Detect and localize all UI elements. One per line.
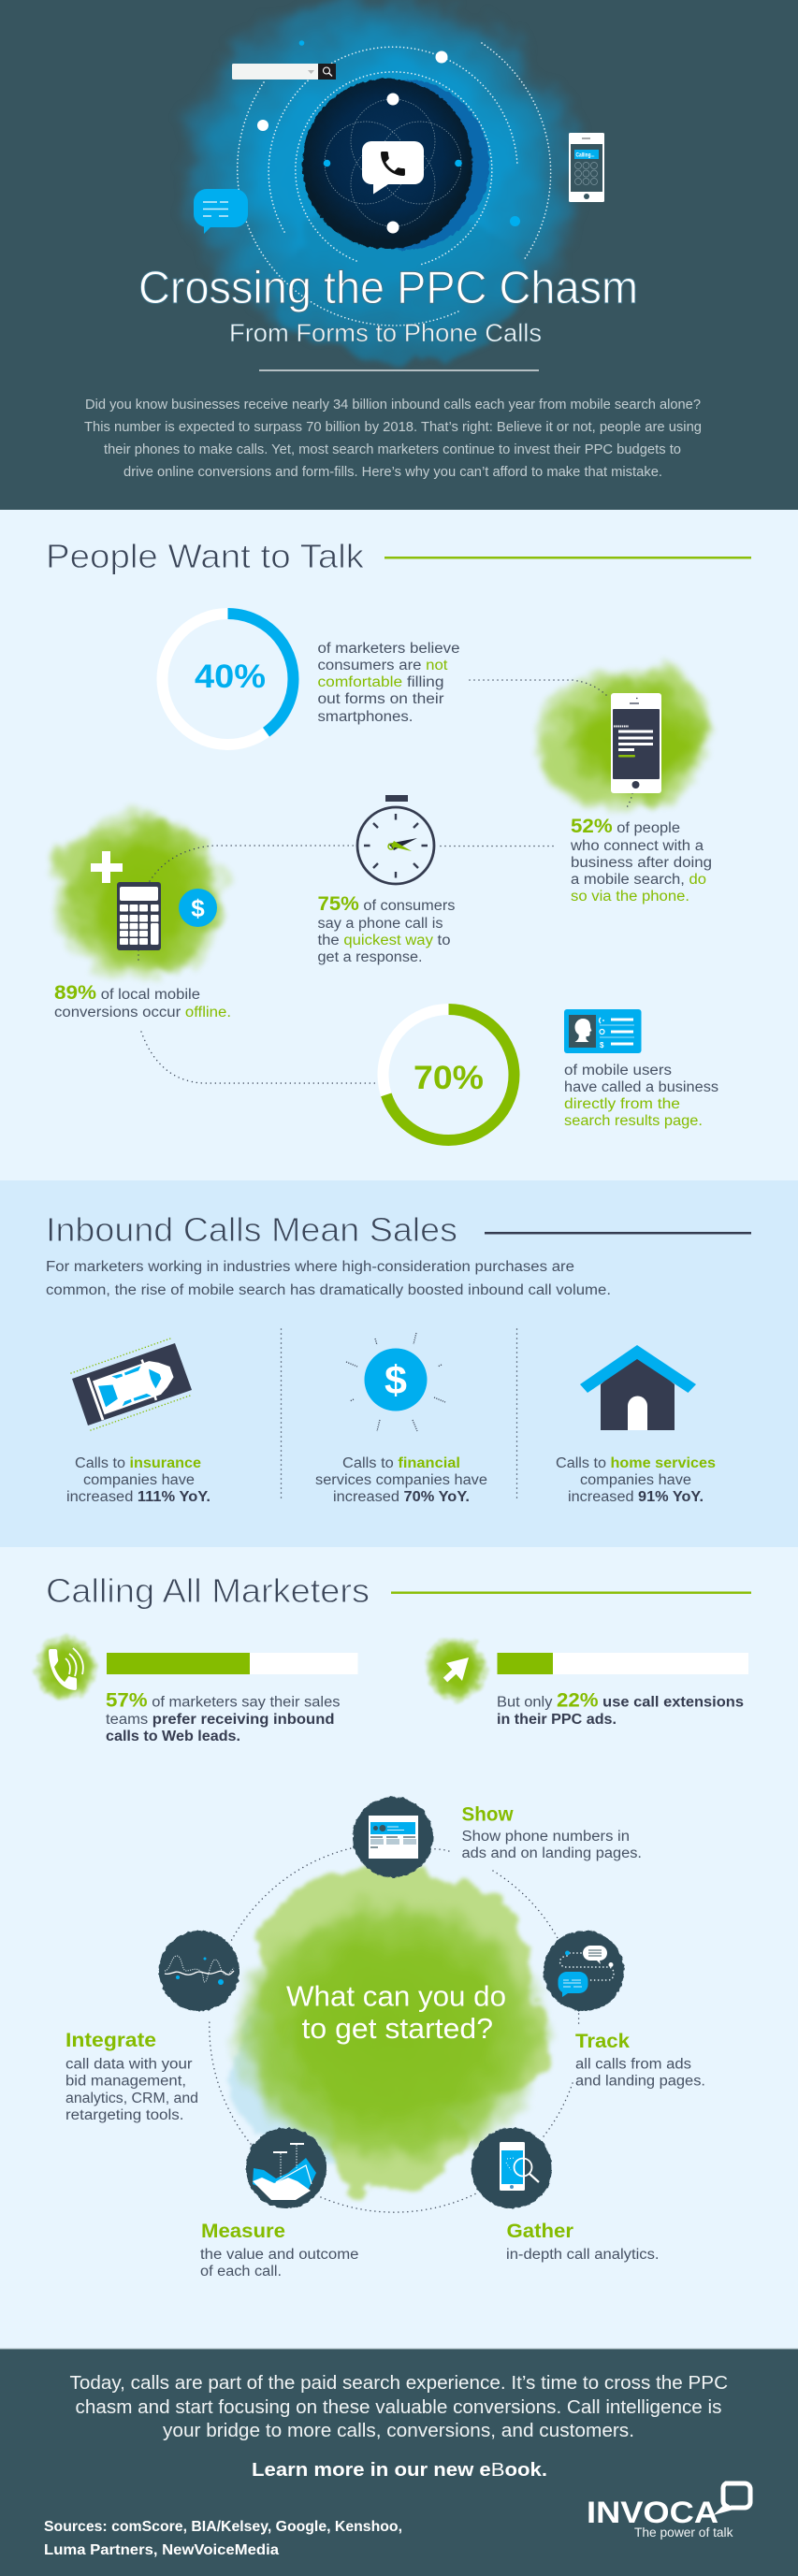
icon: dollar with rays [346,1333,445,1431]
text: 70% stat: of mobile users [564,1063,672,1078]
icon: blue chat bubble [194,189,248,234]
text: home services: Calls to home services [556,1455,716,1471]
text: 22% stat: But only 22% use call extensions [497,1689,744,1712]
text: show: Show phone numbers in [462,1829,630,1845]
panel: Inbound Calls Mean Sales [0,1180,798,1547]
heading: People Want to Talk [46,537,365,575]
donut chart: 40%: 40% [195,658,266,695]
text: 40% stat: out forms on their [318,691,443,707]
text: financial [315,1455,487,1505]
text: insurance: companies have [83,1472,195,1488]
text: insurance: increased 111% YoY. [66,1489,210,1505]
text: gather: Gather [507,2221,573,2242]
text: what can you do [286,1979,506,2045]
logo: Invoca [587,2483,750,2540]
text: 57% stat: teams prefer receiving inbound [106,1712,335,1728]
icon: smartphone calling [569,133,604,202]
panel: hero header [0,0,798,510]
text: insurance: Calls to insurance [75,1455,201,1471]
intro text: For marketers working in industries where high-consideration purchases are [46,1259,574,1275]
text: integrate: call data with your [65,2056,193,2073]
text: 89% stat: 89% of local mobile [54,982,200,1004]
call to action: Learn more in our new e Book. [252,2460,547,2481]
text: 52% stat: so via the phone. [571,889,689,904]
text: measure: of each call. [200,2264,282,2279]
icon: stopwatch [357,795,434,884]
step: measure [246,2128,326,2208]
text: 75% stat: the quickest way to [318,933,451,948]
closing text: your bridge to more calls, conversions, and customers. [163,2421,634,2441]
closing text: Today, calls are part of the paid search experience. It’s time to cross the PPC [69,2373,728,2394]
text: financial: services companies have [315,1472,487,1488]
icon: calculator [91,851,161,950]
text: measure: Measure [201,2221,285,2242]
logo: Invoca: INVOCA [587,2496,718,2529]
icon: contact card [564,1009,642,1053]
text: 70% stat: search results page. [564,1113,703,1129]
text: 75% stat: get a response. [318,949,423,965]
panel: Calling All Marketers [32,1579,751,2276]
bar chart: 22% [498,1653,748,1674]
icon: cursor arrow [425,1636,486,1701]
icon: dollar with rays: $ [384,1358,407,1403]
icon: car on road [71,1338,193,1430]
icon: search bar [232,64,336,80]
sources [44,2519,402,2558]
intro paragraph: drive online conversions and form-fills. Here’s why you can’t afford to make that mistake. [123,465,662,480]
icon: dollar coin: $ [191,894,205,922]
text: 70% stat [564,1063,718,1129]
text: 75% stat [318,893,456,965]
text: 40% stat: comfortable filling [318,674,443,690]
text: 52% stat: 52% of people [571,816,680,837]
icon: phone with form [611,693,661,793]
text: 40% stat: smartphones. [318,709,414,725]
blob: phone form background [539,664,711,814]
heading: Calling All Marketers [46,1571,370,1610]
text: gather: in-depth call analytics. [506,2247,659,2263]
intro text: common, the rise of mobile search has dramatically boosted inbound call volume. [46,1282,611,1298]
bar chart: 57% [107,1653,357,1674]
text: what can you do: to get started? [301,2012,493,2045]
text: integrate: bid management, [65,2073,186,2090]
title: Crossing the PPC Chasm [138,263,638,313]
text: 75% stat: 75% of consumers [318,893,456,915]
text: 57% stat [106,1689,341,1744]
text: 40% stat: of marketers believe [318,641,460,657]
text: 70% stat: have called a business [564,1079,718,1095]
intro paragraph: This number is expected to surpass 70 billion by 2018. That’s right: Believe it or not, people are using [84,420,702,435]
text: integrate: analytics, CRM, and [65,2091,198,2106]
icon: dollar coin [179,889,217,927]
icon: ringing phone [35,1636,96,1701]
text: 57% stat: 57% of marketers say their sales [106,1689,341,1712]
step: gather [472,2128,552,2208]
donut chart: 70% [384,1009,515,1140]
text: integrate: Integrate [65,2030,156,2051]
icon: phone speech bubble [362,141,424,195]
text: home services: increased 91% YoY. [568,1489,704,1505]
text: home services [556,1455,716,1505]
text: 40% stat [318,641,460,725]
text: show: Show [462,1803,514,1826]
donut chart: 40% [163,614,294,745]
text: financial: increased 70% YoY. [333,1489,470,1505]
hero illustration: orbit graphic [173,0,604,360]
intro text [46,1259,611,1298]
step: show [353,1797,433,1877]
donut chart: 70%: 70% [414,1060,484,1096]
text: gather [506,2221,659,2263]
step: track [544,1931,624,2011]
text: show: ads and on landing pages. [462,1845,642,1861]
blob: central green wash [225,1866,550,2191]
intro paragraph: their phones to make calls. Yet, most search marketers continue to invest their PPC budgets to [104,442,681,457]
icon: house [580,1345,696,1430]
text: 22% stat [497,1689,744,1728]
subtitle: From Forms to Phone Calls [229,319,542,347]
step: integrate [159,1931,239,2011]
text: 52% stat [570,816,712,904]
text: 52% stat: business after doing [571,855,712,871]
panel: People Want to Talk [0,510,798,1180]
text: what can you do: What can you do [286,1979,506,2013]
intro paragraph: Did you know businesses receive nearly 34 billion inbound calls each year from mobile search alone? [85,398,701,412]
text: measure [200,2221,359,2279]
closing text [69,2373,728,2441]
logo: Invoca: The power of talk [634,2525,733,2540]
intro paragraph [84,398,702,480]
text: 75% stat: say a phone call is [318,916,443,932]
text: financial: Calls to financial [342,1455,460,1471]
icon: smartphone calling: Calling... [576,152,595,159]
text: home services: companies have [580,1472,691,1488]
text: 52% stat: who connect with a [570,838,704,854]
text: track: all calls from ads [575,2056,691,2073]
text: 70% stat: directly from the [564,1096,680,1112]
heading: Inbound Calls Mean Sales [46,1210,457,1249]
panel: footer [0,2348,798,2576]
closing text: chasm and start focusing on these valuable conversions. Call intelligence is [75,2397,722,2418]
text: 89% stat [54,982,231,1020]
text: 52% stat: a mobile search, do [571,872,706,888]
text: track [575,2031,705,2090]
text: integrate: retargeting tools. [65,2107,183,2123]
sources: Sources: comScore, BIA/Kelsey, Google, Kenshoo, [44,2519,402,2535]
text: show [462,1803,642,1861]
icon: contact card: $ [600,1041,604,1049]
text: 89% stat: conversions occur offline. [54,1005,231,1020]
text: 57% stat: calls to Web leads. [106,1729,240,1744]
blob: calculator background [51,809,225,981]
text: measure: the value and outcome [200,2247,359,2263]
text: 22% stat: in their PPC ads. [497,1712,617,1728]
text: track: and landing pages. [575,2073,705,2090]
text: 40% stat: consumers are not [318,658,448,673]
text: insurance [66,1455,210,1505]
text: track: Track [575,2031,630,2052]
text: integrate [65,2030,198,2123]
sources: Luma Partners, NewVoiceMedia [44,2542,279,2558]
